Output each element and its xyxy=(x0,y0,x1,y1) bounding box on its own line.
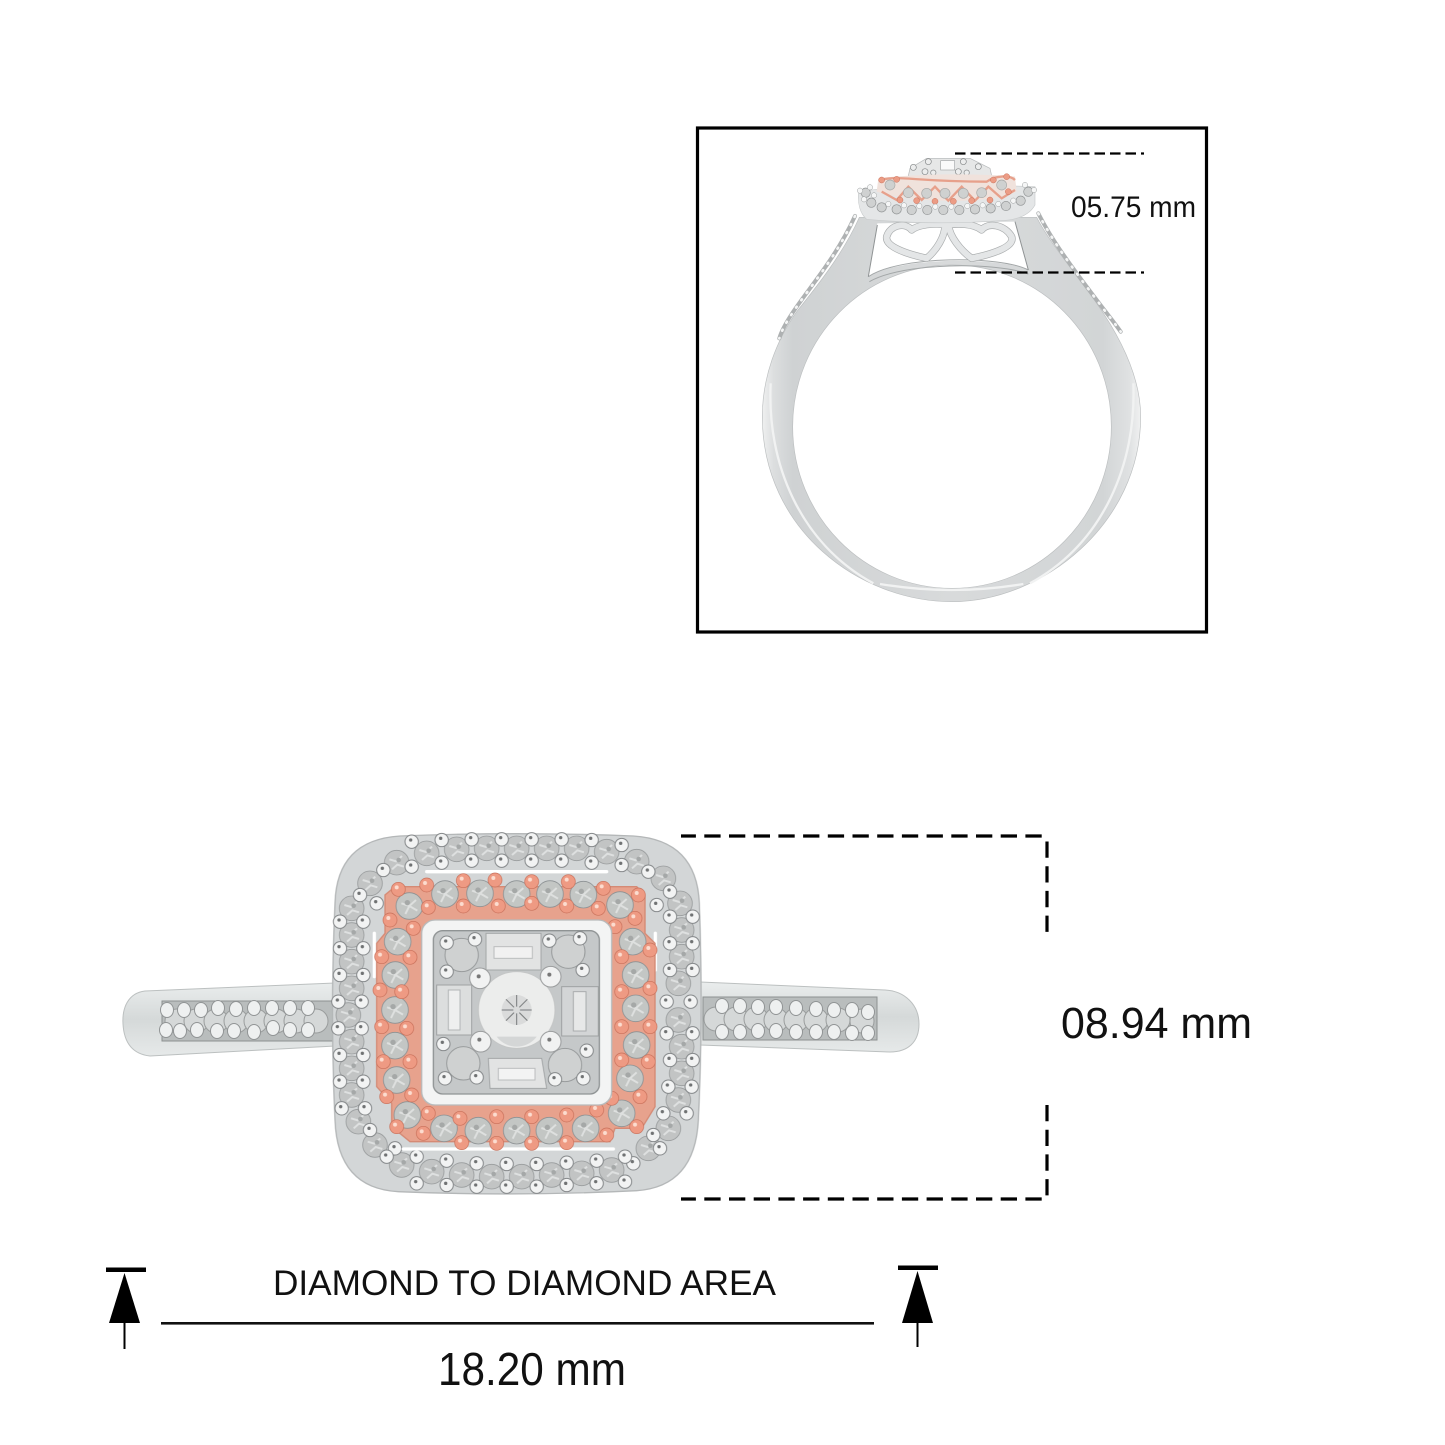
baguette top xyxy=(486,933,541,970)
height label: 05.75 mm xyxy=(1071,191,1196,224)
side view ring xyxy=(762,158,1141,602)
halo gap xyxy=(374,872,655,1149)
heart gallery xyxy=(887,224,1012,258)
center round diamond xyxy=(478,972,555,1048)
outer halo base xyxy=(332,834,701,1194)
head platform xyxy=(858,186,1035,223)
gallery opening xyxy=(868,222,1028,277)
left shank xyxy=(123,983,335,1056)
shoulder stones xyxy=(779,213,1121,338)
diamond area caption: DIAMOND TO DIAMOND AREA xyxy=(273,1264,777,1303)
rose gold halo xyxy=(377,887,655,1142)
top view ring xyxy=(123,833,919,1194)
top dashed measure line xyxy=(955,152,1144,155)
measure line xyxy=(161,1322,874,1325)
baguette bottom xyxy=(488,1058,547,1088)
outer halo side stones xyxy=(861,187,1033,215)
panel: side view frame xyxy=(698,128,1206,632)
rose halo side xyxy=(877,174,1017,204)
corner stones xyxy=(445,935,585,1082)
baguette right xyxy=(562,987,598,1036)
baguette left xyxy=(437,985,472,1035)
bottom dashed measure line xyxy=(955,271,1144,274)
right shank xyxy=(700,982,919,1052)
outer halo side prongs xyxy=(857,182,1037,209)
center setting xyxy=(907,158,993,183)
left arrow marker xyxy=(106,1268,146,1349)
outer halo prongs xyxy=(332,833,699,1193)
head xyxy=(332,833,701,1194)
gallery struts xyxy=(868,222,1028,277)
length label: 18.20 mm xyxy=(438,1343,626,1395)
rose halo stones xyxy=(382,880,650,1144)
outer halo stones xyxy=(336,836,694,1189)
height dimension bracket xyxy=(681,836,1047,1199)
width label: 08.94 mm xyxy=(1061,999,1252,1048)
side ring band xyxy=(762,217,1141,602)
band highlights xyxy=(770,383,1134,590)
center bezel xyxy=(422,920,612,1105)
gallery arcs xyxy=(868,260,1028,282)
center cluster base xyxy=(433,931,599,1094)
rose prongs xyxy=(373,873,657,1150)
right arrow marker xyxy=(898,1266,938,1347)
center prongs xyxy=(437,932,593,1086)
